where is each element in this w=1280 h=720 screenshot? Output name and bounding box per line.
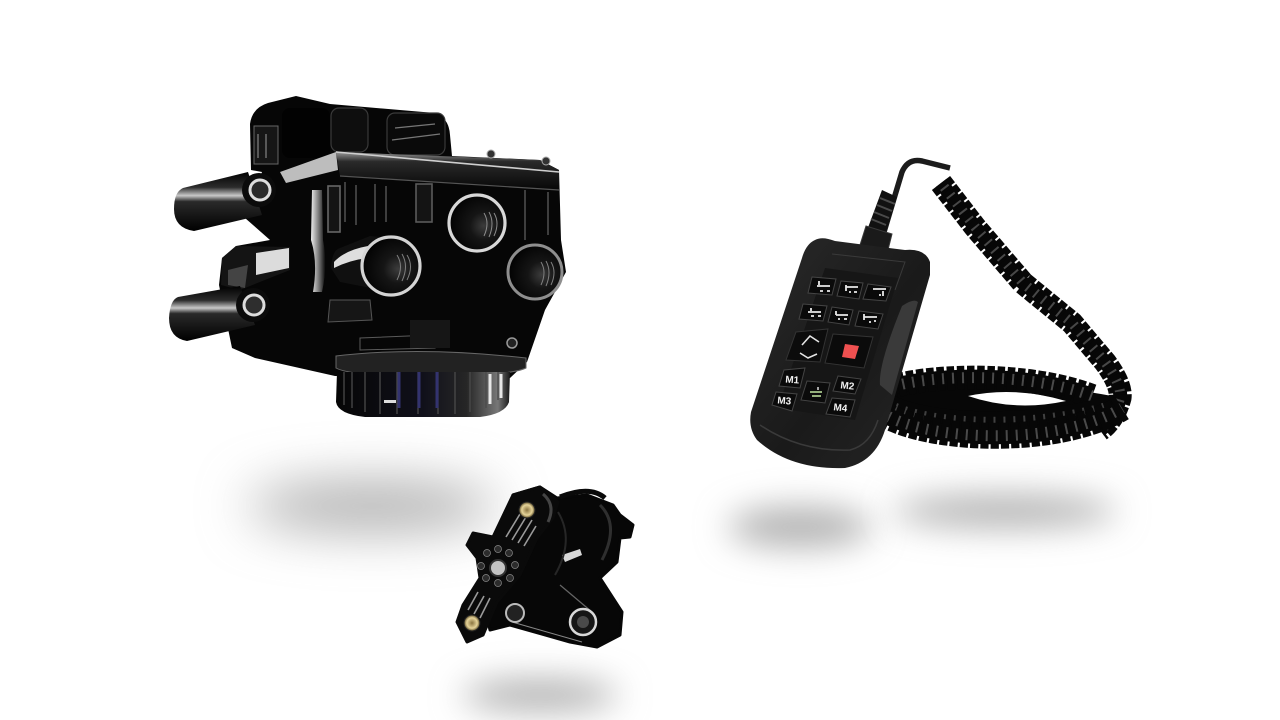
valve silhouette (219, 96, 566, 378)
large valve (169, 96, 566, 417)
function key glyphs (808, 281, 886, 322)
valve ribbed cap (336, 372, 510, 417)
shadow: under remote left (728, 507, 872, 547)
small valve cylinder (555, 491, 611, 575)
memory key M2 (833, 376, 861, 394)
valve lower left pipe (169, 286, 270, 341)
valve port: right (508, 245, 562, 299)
remote keypad face (778, 268, 898, 420)
valve central highlight column (311, 190, 325, 292)
coiled cord (884, 160, 1122, 436)
valve upper left pipe (174, 172, 276, 231)
small valve silhouette (483, 487, 633, 647)
valve lower details (328, 300, 517, 350)
memory key M4: M4 (833, 402, 848, 415)
small valve lower arm (506, 585, 596, 642)
remote housing (750, 238, 930, 468)
small valve mounting plate (457, 487, 558, 642)
hand remote with coiled cord (750, 160, 1122, 468)
valve body ribs (328, 182, 548, 240)
memory key M3 (772, 392, 797, 411)
valve collar (336, 351, 526, 376)
valve top plate (280, 150, 559, 190)
valve port: top right (449, 195, 505, 251)
stop key (825, 334, 873, 368)
memory key M4 (826, 398, 855, 417)
valve middle fitting (221, 246, 290, 290)
centre green icon key (801, 381, 830, 403)
memory key M1: M1 (785, 375, 800, 387)
valve connector block (254, 108, 445, 164)
function keys (799, 277, 891, 329)
memory key M2: M2 (840, 380, 855, 393)
valve port: centre (331, 236, 420, 295)
arrow rocker key (786, 329, 828, 362)
shadow: under large valve (247, 482, 497, 530)
small valve (457, 487, 633, 647)
memory key M1 (779, 368, 805, 388)
shadow: under remote right (893, 495, 1117, 527)
shadow: under small valve (462, 680, 618, 710)
memory key M3: M3 (777, 395, 792, 408)
strain relief (860, 190, 897, 250)
